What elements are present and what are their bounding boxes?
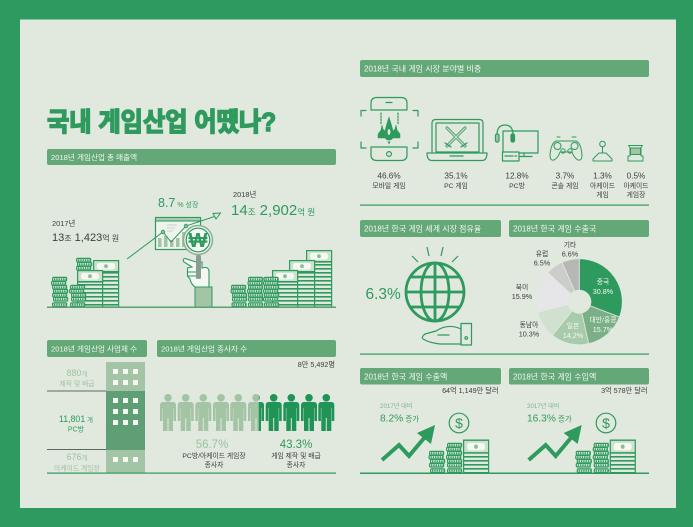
label: North America: 북미 — [516, 282, 528, 292]
label: arcade 1.3%: 1.3% — [593, 172, 612, 180]
panel: game exports — [360, 368, 501, 473]
heading: employees — [157, 340, 336, 357]
heading: exports — [360, 368, 501, 384]
label: arcade 1.3%: 아케이드 — [590, 181, 615, 190]
label: 56.7%: 56.7% — [196, 439, 228, 451]
label: mobile 46.6%: 46.6% — [377, 172, 401, 180]
label: import growth: 2017년 대비 — [527, 402, 560, 410]
label: mobile 46.6% — [372, 172, 406, 190]
label: 2018 revenue: 14조 2,902억 원 — [231, 202, 315, 219]
icon: arcade cabinet — [628, 146, 643, 161]
panel: number of companies — [47, 340, 147, 473]
arrow: growth — [127, 213, 220, 259]
label: 56.7% — [182, 439, 246, 469]
icon: money stack — [429, 440, 489, 473]
label: 2018 revenue — [231, 190, 315, 219]
label: 2018 revenue: 2018년 — [233, 190, 256, 199]
label: PC 35.1%: 35.1% — [444, 172, 468, 180]
label: 11,801 PC bang — [59, 414, 93, 434]
label: arcade 1.3%: 게임 — [596, 190, 609, 199]
label: export amount: 64억 1,149만 달러 — [442, 386, 498, 395]
icon: hand — [183, 255, 212, 307]
icon: magnifier with won sign — [184, 226, 212, 254]
heading: sectors: 2018년 국내 게임 시장 분야별 비중 — [364, 64, 481, 74]
label: PC bang 12.8%: PC방 — [509, 181, 525, 190]
label: 2017 revenue: 13조 1,423억 원 — [52, 232, 119, 244]
icon: arcade joystick — [593, 141, 612, 161]
label: Taiwan/HK — [590, 315, 616, 334]
label: SE Asia: 동남아 — [520, 320, 539, 329]
label: 43.3%: 43.3% — [280, 439, 312, 451]
icon: rays — [412, 247, 458, 262]
label: PC 35.1%: PC 게임 — [444, 181, 468, 190]
label: Japan: 14.2% — [563, 331, 584, 340]
label: 43.3%: 종사자 — [287, 460, 306, 469]
chart: building — [47, 362, 145, 473]
label: Taiwan/HK: 대만/홍콩 — [590, 315, 616, 324]
label: arcade venue 0.5% — [623, 172, 649, 199]
label: SE Asia: 10.3% — [519, 330, 540, 338]
label: North America — [512, 282, 533, 301]
chart: donut — [536, 259, 622, 345]
heading: export countries: 2018년 한국 게임 수출국 — [513, 224, 596, 234]
arrow: export trend — [382, 425, 435, 460]
label: PC bang 12.8%: 12.8% — [505, 172, 529, 180]
label: arcade venue 0.5%: 게임장 — [627, 190, 645, 199]
label: import growth: 16.3% 증가 — [527, 414, 572, 424]
label: total employees: 8만 5,492명 — [298, 360, 335, 369]
label: console 3.7% — [552, 172, 578, 190]
label: China — [593, 278, 614, 296]
label: Europe: 6.5% — [534, 258, 551, 268]
label: Other — [562, 240, 579, 258]
icon: money stacks 2018 — [231, 251, 332, 307]
label: Japan — [563, 321, 584, 340]
chart: people pictogram — [160, 394, 334, 431]
icon: money stack — [576, 440, 635, 473]
label: export growth: 2017년 대비 — [380, 402, 413, 410]
heading: sectors — [360, 60, 649, 77]
heading: employees: 2018년 게임산업 종사자 수 — [161, 344, 247, 354]
label: export growth — [380, 402, 419, 424]
panel: game imports — [509, 368, 649, 473]
label: PC bang 12.8% — [505, 172, 529, 190]
icon: globe — [406, 263, 464, 321]
icon: money stacks 2017 — [52, 258, 119, 307]
label: 11,801 PC bang: 11,801 개 — [59, 414, 93, 424]
label: export growth: 8.2% 증가 — [380, 414, 419, 424]
label: 880 production — [59, 368, 95, 388]
panel: total revenue — [47, 149, 336, 308]
heading: world share: 2018년 한국 게임 세계 시장 점유율 — [364, 224, 481, 234]
label: Taiwan/HK: 15.7% — [593, 325, 614, 334]
label: Europe: 유럽 — [536, 249, 548, 258]
label: 880 production: 제작 및 배급 — [59, 379, 95, 388]
icon: PC laptop — [427, 120, 487, 160]
label: 2017 revenue — [52, 219, 119, 244]
label: 676 arcade: 아케이드 게임장 — [54, 464, 100, 472]
icon: chart window — [156, 218, 200, 250]
label: mobile 46.6%: 모바일 게임 — [372, 181, 406, 190]
label: China: 중국 — [597, 278, 609, 286]
heading: total revenue — [47, 149, 336, 165]
icon: dollar coin: $ — [602, 415, 610, 431]
label: PC 35.1% — [444, 172, 468, 190]
label: 8.7% growth: 8.7 % 성장 — [158, 196, 199, 210]
heading: world share — [360, 220, 501, 237]
icon: magnifier with won sign: ₩ — [189, 230, 208, 252]
label: 676 arcade: 676개 — [67, 452, 87, 462]
label: 676 arcade — [54, 452, 100, 472]
heading: companies: 2018년 게임산업 사업체 수 — [51, 344, 137, 354]
icon: PC bang — [496, 125, 538, 161]
icon: dollar coin — [449, 413, 469, 433]
label: SE Asia — [519, 320, 540, 338]
label: 56.7%: 종사자 — [205, 460, 224, 469]
label: China: 30.8% — [593, 287, 614, 296]
icon: hand with bill — [422, 324, 472, 345]
panel: employees — [157, 340, 336, 469]
label: Europe — [534, 249, 551, 268]
title: 국내 게임산업 어땠나? — [47, 107, 276, 137]
label: Other: 기타 — [564, 240, 577, 249]
label: Japan: 일본 — [567, 321, 579, 330]
icon: console gamepad — [550, 137, 582, 160]
arrow: import trend — [529, 425, 582, 460]
panel: export countries — [509, 220, 649, 345]
label: 880 production: 880개 — [67, 368, 87, 378]
label: arcade venue 0.5%: 아케이드 — [623, 181, 649, 190]
heading: exports: 2018년 한국 게임 수출액 — [364, 372, 447, 382]
label: console 3.7%: 3.7% — [556, 172, 574, 180]
panel: market share by sector — [360, 60, 649, 199]
heading: imports: 2018년 한국 게임 수입액 — [513, 372, 596, 382]
heading: total revenue: 2018년 게임산업 총 매출액 — [51, 152, 137, 162]
label: 56.7%: PC방/아케이드 게임장 — [182, 451, 246, 460]
label: arcade 1.3% — [590, 172, 615, 199]
icon: mobile — [361, 98, 418, 160]
label: 2017 revenue: 2017년 — [52, 219, 75, 228]
label: import growth — [527, 402, 572, 424]
label: arcade venue 0.5%: 0.5% — [627, 172, 645, 180]
label: 43.3%: 게임 제작 및 배급 — [271, 451, 321, 460]
label: 43.3% — [271, 439, 321, 469]
label: North America: 15.9% — [512, 292, 533, 301]
label: import amount: 3억 578만 달러 — [601, 386, 648, 395]
label: console 3.7%: 콘솔 게임 — [552, 181, 578, 190]
label: 6.3%: 6.3% — [366, 286, 401, 303]
panel: world market share — [360, 220, 501, 345]
label: 11,801 PC bang: PC방 — [68, 424, 85, 434]
icon: dollar coin: $ — [455, 415, 463, 431]
label: Other: 6.6% — [562, 250, 579, 258]
